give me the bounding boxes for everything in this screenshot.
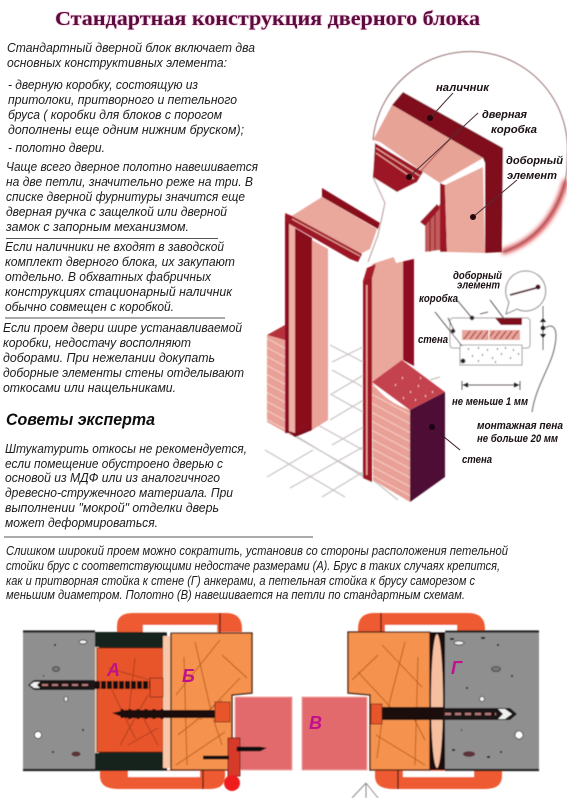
label: mounting foam (477, 420, 563, 445)
text block: casings: комплект дверного блока, их закупают (5, 255, 235, 269)
foam strip right (430, 632, 445, 770)
width dimension (462, 381, 520, 390)
foam dimension (532, 306, 556, 412)
text block: expert tips: основой из МДФ или из аналогичного (5, 471, 220, 485)
text block: extension pieces: коробки, недостачу восполняют (3, 336, 191, 350)
wall block (372, 360, 445, 502)
text block: list of elements (8, 78, 245, 155)
screw callout (506, 271, 546, 314)
floor tile grid (265, 345, 440, 500)
label: door frame: коробка (491, 124, 537, 136)
text block: hinges and hardware: на две петли, значительно реже на три. В (6, 175, 253, 189)
diagram: right installation section (302, 613, 539, 798)
letter B: Б (182, 666, 195, 686)
frame head piece (285, 188, 380, 262)
frame post B left (171, 633, 252, 770)
text block: casings: Если наличники не входят в заводской (5, 240, 224, 254)
text block: narrowing a wide opening: как и притворная стойка к стене (Г) анкерами, а петельная стойка к брусу саморезом с (6, 574, 476, 588)
diagram: door frame isometric (265, 188, 445, 502)
text block: expert tips: Штукатурить откосы не рекомендуется, (5, 442, 247, 456)
label: extension element: элемент (507, 170, 557, 182)
label: door frame: дверная (482, 109, 528, 121)
heading: expert tips: Советы эксперта (6, 410, 155, 429)
text block: expert tips (5, 442, 247, 530)
text block: expert tips: если помещение обустроено дверью с (5, 457, 224, 471)
label: frame small: коробка (419, 293, 458, 305)
anchor left (28, 678, 163, 697)
text block: hinges and hardware (5, 160, 258, 234)
label: wall small: стена (418, 334, 448, 346)
text block: extension pieces: Если проем двери шире устанавливаемой (3, 321, 242, 335)
frame post right (348, 632, 430, 770)
magnifier circle detail (368, 52, 567, 263)
wall section (460, 345, 522, 365)
inner side panel (420, 167, 485, 253)
text block: list of elements: - полотно двери. (8, 141, 105, 155)
text block: hinges and hardware: списке дверной фурнитуры значится еще (6, 190, 245, 204)
label: extension element small: доборный (453, 270, 502, 282)
text block: narrowing a wide opening: Слишком широкий проем можно сократить, установив со стороны расположения петельной (6, 544, 508, 558)
text block: list of elements: притолоки, притворного и петельного (8, 93, 237, 107)
text block: extension pieces: доборами. При нежелании докупать (3, 351, 215, 365)
text block: expert tips: древесно-стружечного материала. При (5, 486, 233, 500)
text block: narrowing a wide opening (6, 544, 508, 602)
text block: extension pieces: откосами или нащельниками. (3, 381, 176, 395)
label: door frame (406, 109, 537, 180)
label: wall: стена (462, 454, 492, 466)
text block: casings: обычно совмещен с коробкой. (5, 300, 174, 314)
text block: hinges and hardware: замок с запорным механизмом. (5, 220, 189, 234)
label: casing (427, 82, 490, 121)
top casing left (117, 613, 242, 648)
text block: hinges and hardware: дверная ручка с защелкой или дверной (6, 205, 227, 219)
grey wall right (445, 631, 539, 771)
label: minimum gap: не меньше 1 мм (452, 396, 528, 408)
diagram: left installation section (23, 613, 292, 791)
text block: intro: основных конструктивных элемента: (7, 56, 227, 70)
text block: list of elements: бруса ( коробки для блоков с порогом (8, 108, 222, 122)
self-tapping screw left (112, 702, 230, 722)
soffit (373, 105, 483, 183)
letter V: В (309, 713, 322, 733)
label: casing: наличник (436, 82, 490, 94)
ridged frame section (373, 143, 423, 192)
text block: hinges and hardware: Чаще всего дверное полотно навешивается (6, 160, 258, 174)
text block: narrowing a wide opening: меньшим диаметром. Полотно (В) навешивается на петли по стандартным схемам. (6, 588, 465, 602)
label: extension element: доборный (506, 155, 563, 167)
bottom casing right (375, 755, 502, 789)
label: extension element small (453, 270, 502, 292)
text block: list of elements: дополнены еще одним нижним бруском); (8, 123, 245, 137)
label: extension element (470, 155, 563, 220)
top casing right (358, 613, 485, 648)
left jamb (285, 215, 328, 437)
text block: extension pieces (3, 321, 244, 395)
casing band (392, 92, 503, 253)
door leaf B left part (235, 697, 292, 770)
letter G: Г (451, 658, 463, 678)
text block: intro (7, 41, 255, 70)
letter A: А (106, 660, 120, 680)
text block: casings: конструкциях стационарный наличник (5, 285, 233, 299)
section leaders (435, 300, 505, 363)
filler bar A (95, 632, 167, 771)
door leaf B right part (302, 697, 367, 770)
grey wall left (23, 631, 95, 771)
anchor right (371, 704, 517, 724)
label: wall (429, 424, 492, 466)
text block: extension pieces: доборные элементы стены отделывают (3, 366, 244, 380)
text block: list of elements: - дверную коробку, состоящую из (8, 78, 198, 92)
text block: intro: Стандартный дверной блок включает два (7, 41, 255, 55)
text block: narrowing a wide opening: стойки брус с соответствующими недостаче размерами (А). Брус в таких случаях крепится, (6, 559, 500, 573)
text block: casings (5, 240, 235, 314)
left wall stub (267, 325, 285, 432)
title: Стандартная конструкция дверного блока (55, 8, 480, 30)
extension element (495, 318, 522, 325)
text block: expert tips: может деформироваться. (5, 516, 158, 530)
text block: expert tips: выполнении "мокрой" отделки дверь (5, 501, 219, 515)
label: extension element small: элемент (457, 280, 500, 292)
section diagram (435, 271, 556, 412)
title: Стандартная конструкция дверного блока (55, 8, 480, 30)
frame box (450, 318, 530, 348)
pointer marks below (352, 783, 378, 798)
hinge (203, 738, 263, 791)
bottom casing left (100, 757, 225, 789)
hatched frame core (462, 330, 520, 340)
right jamb (363, 251, 414, 482)
text block: casings: отдельно. В обхватных фабричных (5, 270, 212, 284)
